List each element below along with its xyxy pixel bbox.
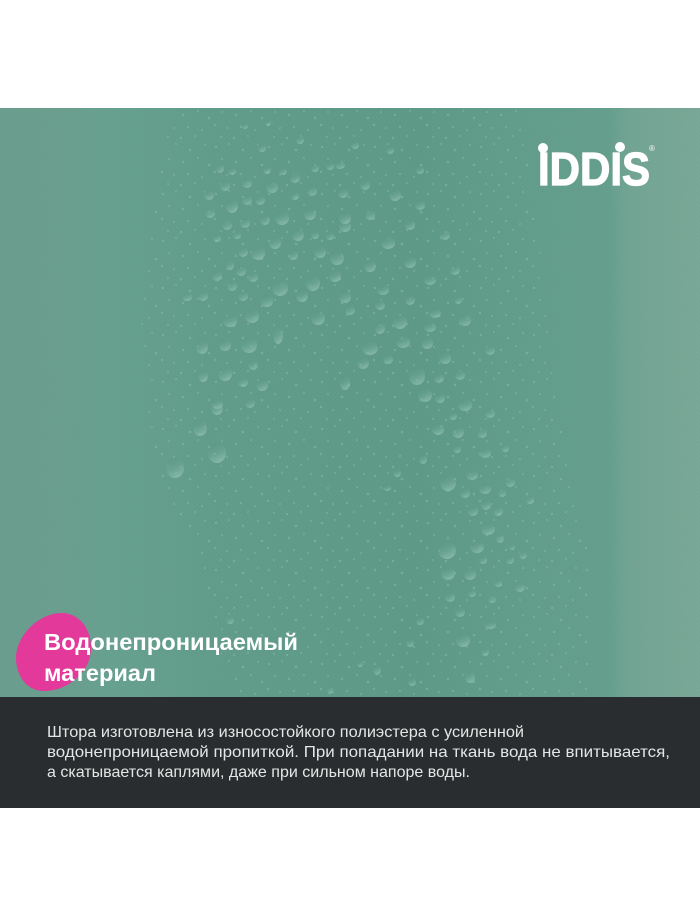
panel: description band	[0, 697, 700, 808]
small water beads	[140, 108, 590, 697]
logo: IDDIS: IDDIS	[538, 143, 650, 195]
water droplets	[166, 120, 534, 694]
heading: материал	[44, 660, 156, 686]
pink blob accent	[16, 613, 91, 691]
description text	[47, 724, 670, 781]
logo: IDDIS: ®	[649, 144, 655, 153]
heading: Водонепроницаемый	[44, 629, 298, 655]
description text: Штора изготовлена из износостойкого полиэстера с усиленной	[47, 724, 524, 741]
panel: water droplets fabric photo	[0, 108, 700, 697]
description text: водонепроницаемой пропиткой. При попадании на ткань вода не впитывается,	[47, 744, 670, 761]
description text: а скатывается каплями, даже при сильном напоре воды.	[47, 764, 470, 781]
heading	[44, 629, 298, 686]
